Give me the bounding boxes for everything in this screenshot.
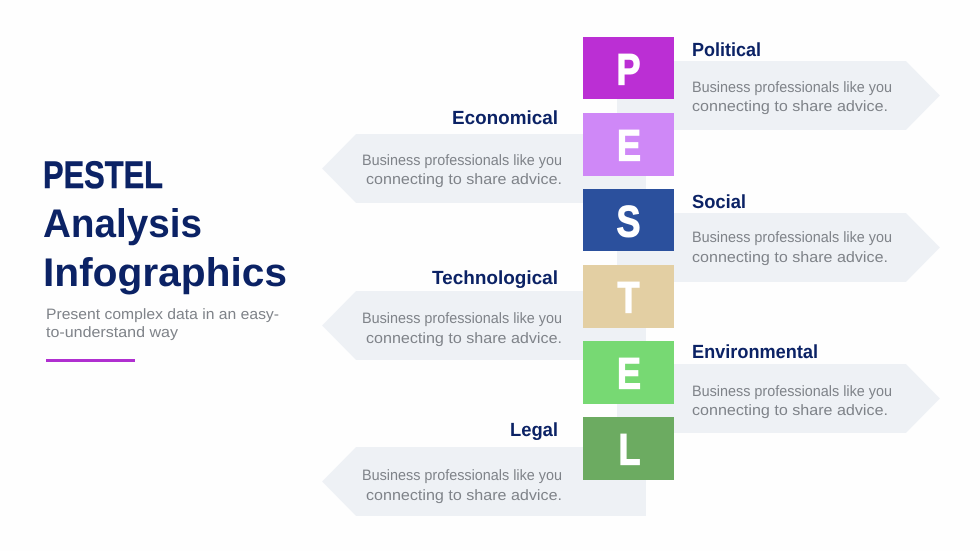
arrow panel: legal [322, 447, 646, 516]
letter block: E: E [617, 350, 641, 398]
title: Analysis [43, 202, 202, 246]
letter block: T: T [618, 274, 640, 322]
title: Infographics [43, 251, 287, 295]
heading: Economical: Economical [452, 108, 558, 129]
letter block: P [583, 37, 674, 99]
heading: Social: Social [692, 192, 746, 213]
text: legal [362, 467, 562, 504]
heading: Legal: Legal [510, 420, 558, 441]
text: social [692, 229, 892, 266]
text: social: connecting to share advice. [692, 249, 888, 266]
arrow panel: social [617, 213, 940, 282]
letter block: S: S [616, 198, 640, 246]
text: environmental: Business professionals like you [692, 383, 892, 400]
text: political: Business professionals like you [692, 79, 892, 96]
subtitle: Present complex data in an easy- [46, 306, 279, 323]
letter block: S [583, 189, 674, 251]
text: legal: connecting to share advice. [366, 487, 562, 504]
arrow panel: economical [322, 134, 646, 203]
letter block: T [583, 265, 674, 328]
text: environmental: connecting to share advice. [692, 402, 888, 419]
arrow panel: technological [322, 291, 646, 360]
arrow panel: political [617, 61, 940, 130]
letter block: L [583, 417, 674, 480]
arrow panel: environmental [617, 364, 940, 433]
letter block: L: L [618, 426, 640, 474]
text: legal: Business professionals like you [362, 467, 562, 484]
text: social: Business professionals like you [692, 229, 892, 246]
text: political [692, 79, 892, 115]
letter block: E [583, 113, 674, 176]
title [43, 154, 287, 295]
heading: Environmental: Environmental [692, 342, 818, 363]
subtitle: to-understand way [46, 324, 179, 341]
text: political: connecting to share advice. [692, 98, 888, 115]
letter block: P: P [616, 46, 640, 94]
text: economical: connecting to share advice. [366, 171, 562, 188]
letter block: E [583, 341, 674, 404]
text: technological: connecting to share advice. [366, 330, 562, 347]
letter block: E: E [617, 122, 641, 170]
text: economical: Business professionals like you [362, 152, 562, 169]
text: environmental [692, 383, 892, 419]
text: economical [362, 152, 562, 188]
accent line [46, 359, 135, 362]
text: technological [362, 310, 562, 347]
text: technological: Business professionals like you [362, 310, 562, 327]
title: PESTEL [43, 154, 163, 197]
heading: Technological: Technological [432, 268, 558, 289]
heading: Political: Political [692, 40, 761, 61]
subtitle [46, 306, 279, 341]
